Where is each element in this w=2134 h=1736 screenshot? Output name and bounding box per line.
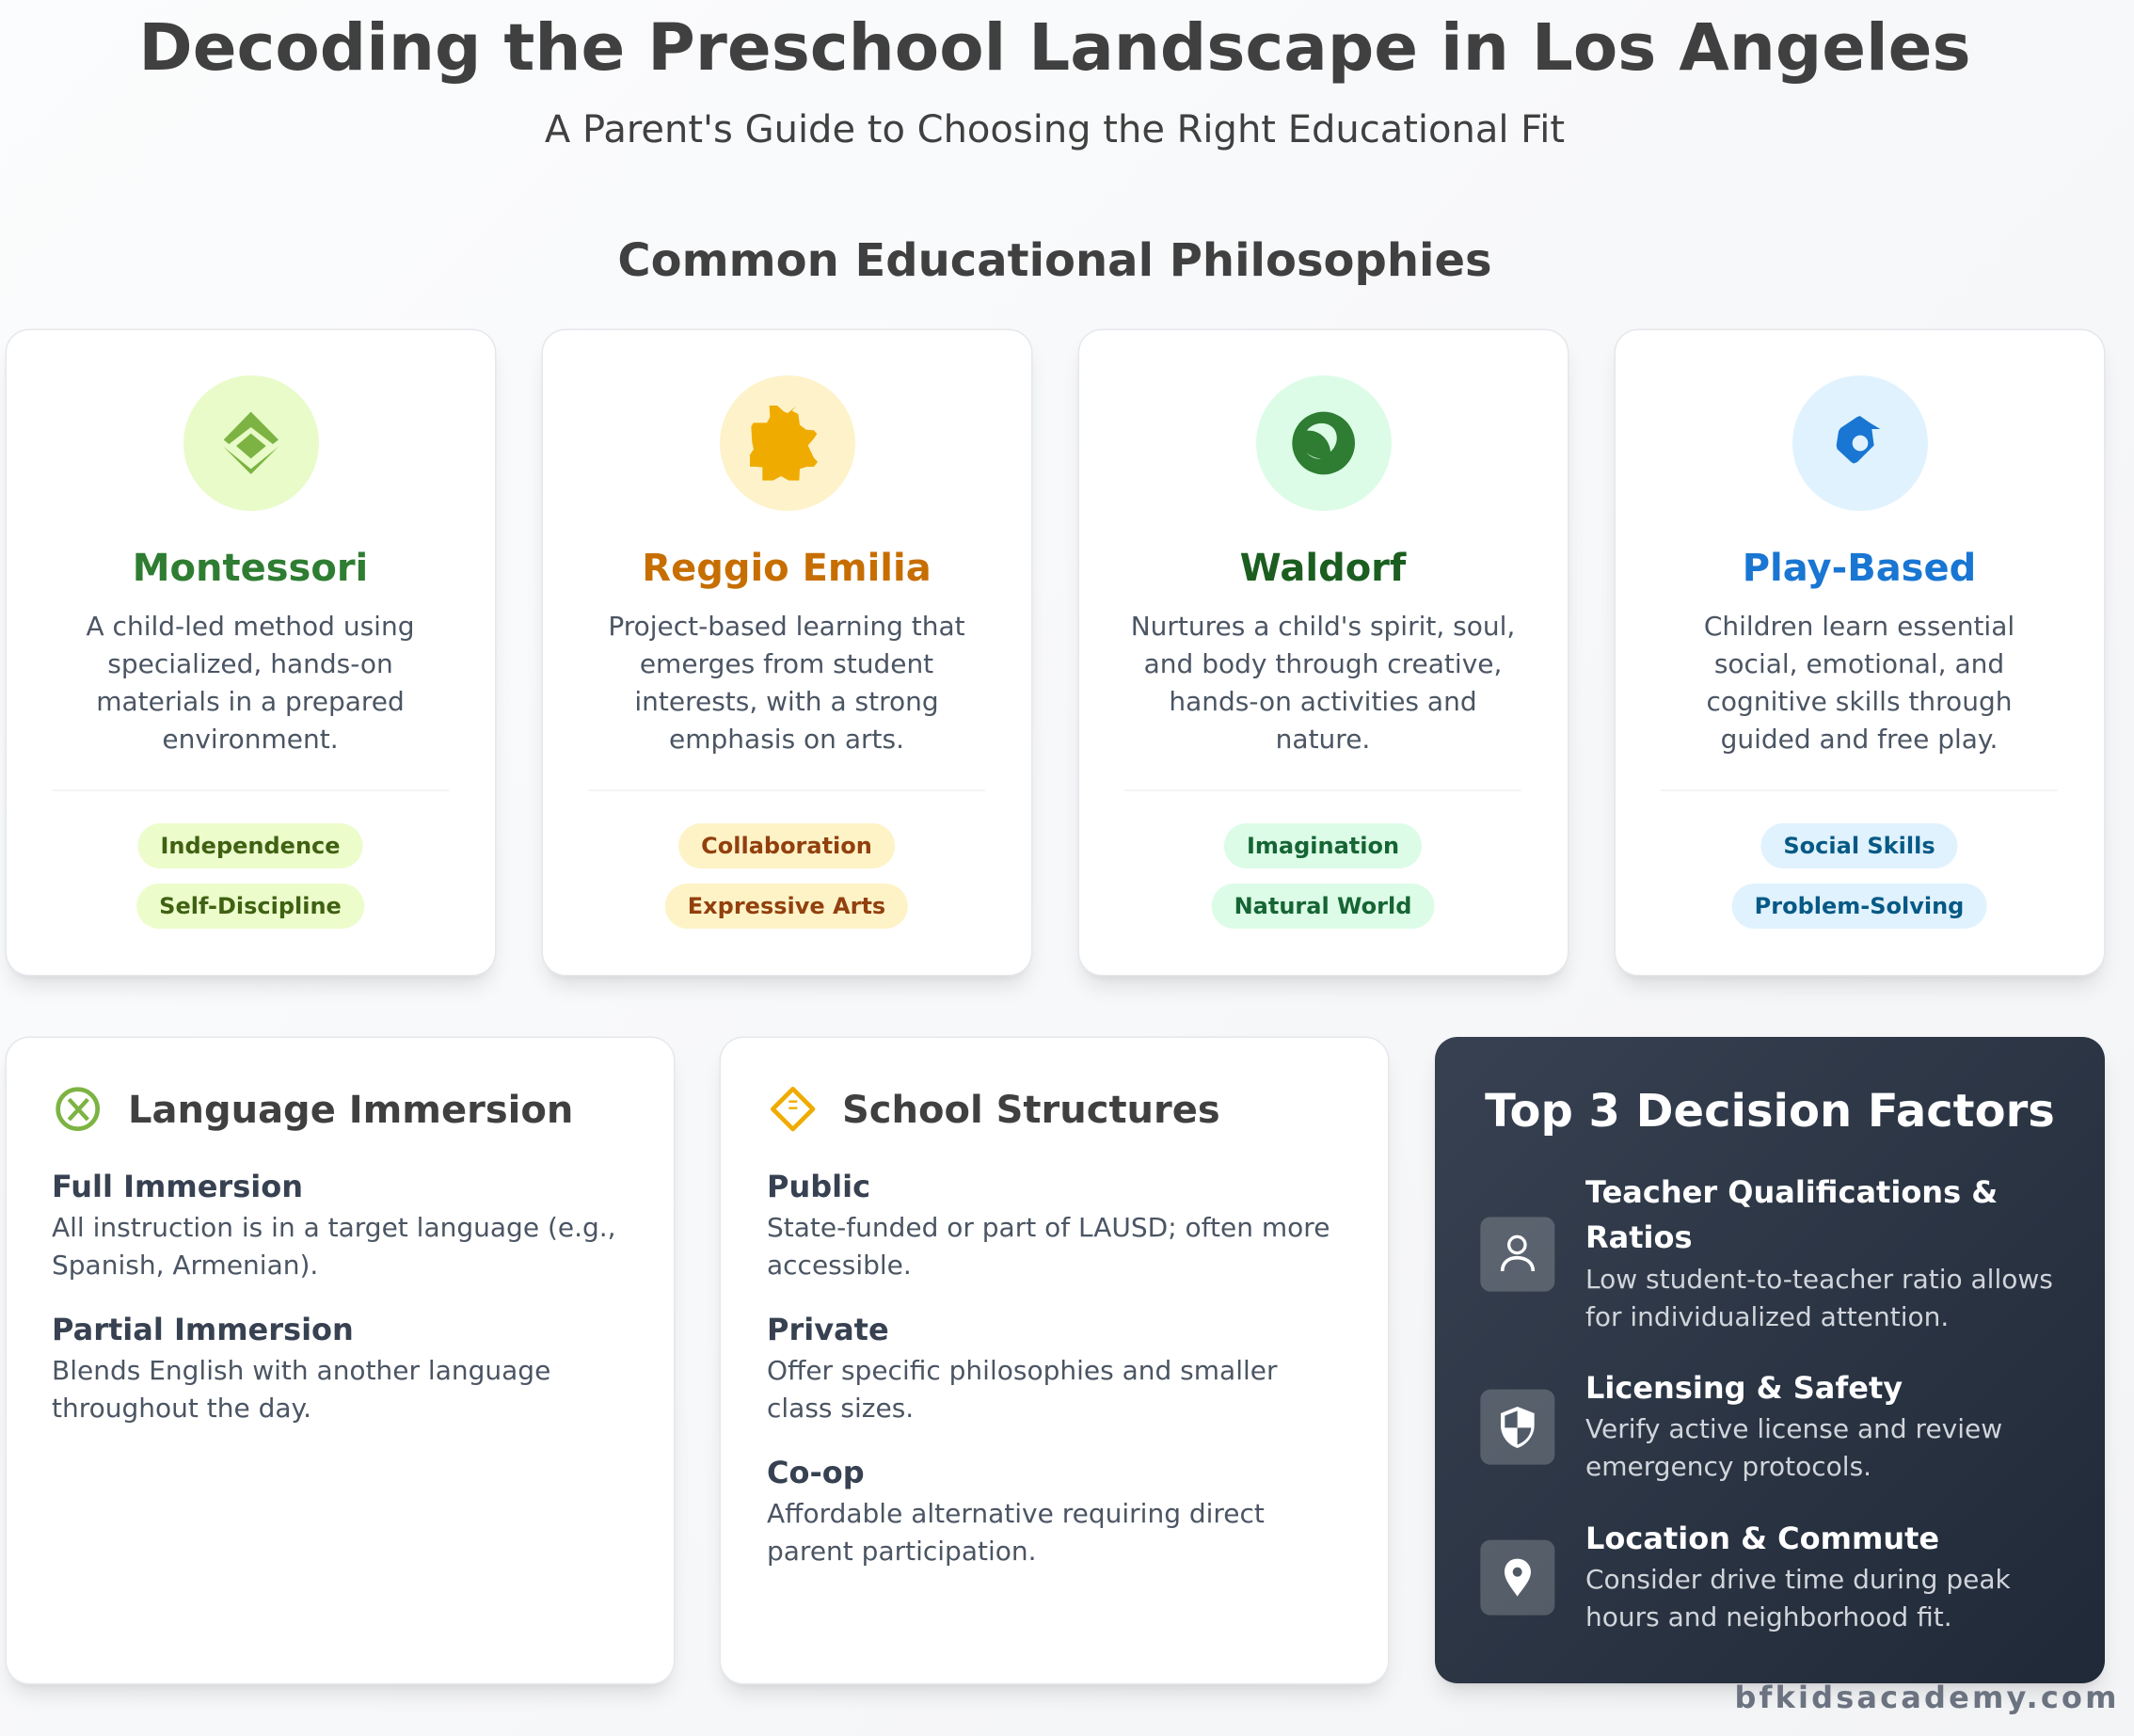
factor text: Teacher Qualifications: for individualized attention. [1585,1301,1949,1332]
card title: Reggio Emilia [642,546,932,589]
factor heading: Location & Commute: Location & Commute [1585,1521,1939,1556]
description: A child-led method using [87,611,414,642]
tag: Social Skills [1760,823,1958,868]
factor text: Location & Commute: Consider drive time during peak [1585,1564,2011,1595]
panel heading: School Structures [842,1089,1220,1132]
entry text: Full Immersion: Spanish, Armenian). [52,1250,318,1281]
description: social, emotional, and [1714,648,2004,679]
entry text: Partial Immersion: throughout the day. [52,1393,311,1424]
card title: Play-Based [1743,546,1976,589]
tag: Independence: Independence [160,833,341,859]
entry text: Public: accessible. [767,1250,912,1281]
entry text: Partial Immersion: Blends English with another language [52,1355,550,1386]
subtitle: A Parent's Guide to Choosing the Right Educational Fit [545,108,1565,151]
entry text: Co-op: parent participation. [767,1536,1037,1567]
icon: Reggio sunburst blob [720,375,855,511]
factor heading: Teacher Qualifications: Teacher Qualifications & [1585,1174,1998,1210]
tag: Natural World [1212,884,1434,929]
icon: Montessori layered diamond [183,375,319,511]
description: emerges from student [640,648,933,679]
entry heading: Public: Public [767,1169,870,1204]
description: Children learn essential [1704,611,2015,642]
tag: Problem-Solving [1732,884,1986,929]
entry text: Full Immersion [52,1212,616,1281]
tag: Social Skills: Social Skills [1783,833,1935,859]
entry text: Private [767,1355,1278,1424]
entry text: Co-op [767,1498,1265,1567]
panel: School Structures [721,1037,1388,1683]
entry heading: Full Immersion: Full Immersion [52,1169,303,1204]
description: guided and free play. [1721,724,1998,755]
factor heading: Teacher Qualifications: Ratios [1585,1219,1693,1255]
tag: Natural World: Natural World [1234,893,1411,919]
entry text: Public: State-funded or part of LAUSD; often more [767,1212,1330,1243]
tag: Imagination [1224,823,1422,868]
tag: Self-Discipline [136,884,364,929]
icon: Waldorf moon circle [1256,375,1392,511]
icon: shield [1480,1389,1554,1465]
entry heading: Co-op: Co-op [767,1455,865,1490]
panel heading: Language Immersion [128,1089,573,1132]
description [608,611,965,755]
card title: Waldorf [1240,546,1406,589]
tag: Independence [137,823,363,868]
tag: Expressive Arts [665,884,908,929]
description: emphasis on arts. [669,724,904,755]
description: and body through creative, [1144,648,1502,679]
panel: Play-Based [1615,329,2104,975]
panel heading: Top 3 Decision Factors [1485,1085,2055,1138]
panel: Waldorf [1078,329,1568,975]
description: cognitive skills through [1707,686,2012,717]
description: Project-based learning that [608,611,965,642]
panel: Reggio Emilia [542,329,1031,975]
description [1704,611,2015,755]
description: nature. [1276,724,1370,755]
panel: Language Immersion [6,1037,674,1683]
panel: Top 3 Decision Factors [1435,1037,2105,1683]
tag: Collaboration [678,823,895,868]
tag: Problem-Solving: Problem-Solving [1755,893,1964,919]
description: Nurtures a child's spirit, soul, [1131,611,1515,642]
factor text: Licensing & Safety: Verify active license and review [1585,1413,2002,1444]
icon: outlined diamond [771,1087,815,1131]
entry text: Private: class sizes. [767,1393,914,1424]
footer watermark: bfkidsacademy.com [1735,1680,2120,1715]
factor text: Teacher Qualifications: Low student-to-teacher ratio allows [1585,1264,2053,1295]
description: interests, with a strong [634,686,939,717]
factor text: Location & Commute [1585,1564,2011,1632]
factor heading: Licensing & Safety: Licensing & Safety [1585,1370,1903,1406]
tag: Imagination: Imagination [1247,833,1399,859]
description: environment. [162,724,339,755]
description: hands-on activities and [1169,686,1477,717]
icon: circled X [56,1087,100,1131]
entry heading: Partial Immersion: Partial Immersion [52,1312,354,1347]
entry text: Partial Immersion [52,1355,550,1424]
description: materials in a prepared [96,686,405,717]
title: Decoding the Preschool Landscape in Los Angeles [138,10,1971,86]
factor text: Licensing & Safety [1585,1413,2002,1482]
panel: Montessori [6,329,495,975]
entry text: Full Immersion: All instruction is in a target language (e.g., [52,1212,616,1243]
factor text: Licensing & Safety: emergency protocols. [1585,1451,1871,1482]
tag: Expressive Arts: Expressive Arts [688,893,885,919]
factor heading: Teacher Qualifications [1585,1174,1998,1255]
card title: Montessori [133,546,368,589]
icon: person [1480,1217,1554,1292]
factor text: Teacher Qualifications [1585,1264,2053,1332]
description: specialized, hands-on [107,648,393,679]
tag: Collaboration: Collaboration [701,833,872,859]
entry text: Private: Offer specific philosophies and smaller [767,1355,1278,1386]
entry heading: Private: Private [767,1312,889,1347]
description [87,611,414,755]
factor text: Location & Commute: hours and neighborhood fit. [1585,1601,1952,1632]
icon: Play-Based hexagon tag [1792,375,1928,511]
section heading: philosophies: Common Educational Philosophies [617,234,1492,287]
entry text: Co-op: Affordable alternative requiring direct [767,1498,1265,1529]
entry text: Public [767,1212,1330,1281]
tag: Self-Discipline: Self-Discipline [159,893,342,919]
icon: map pin [1480,1539,1554,1616]
description [1131,611,1515,755]
